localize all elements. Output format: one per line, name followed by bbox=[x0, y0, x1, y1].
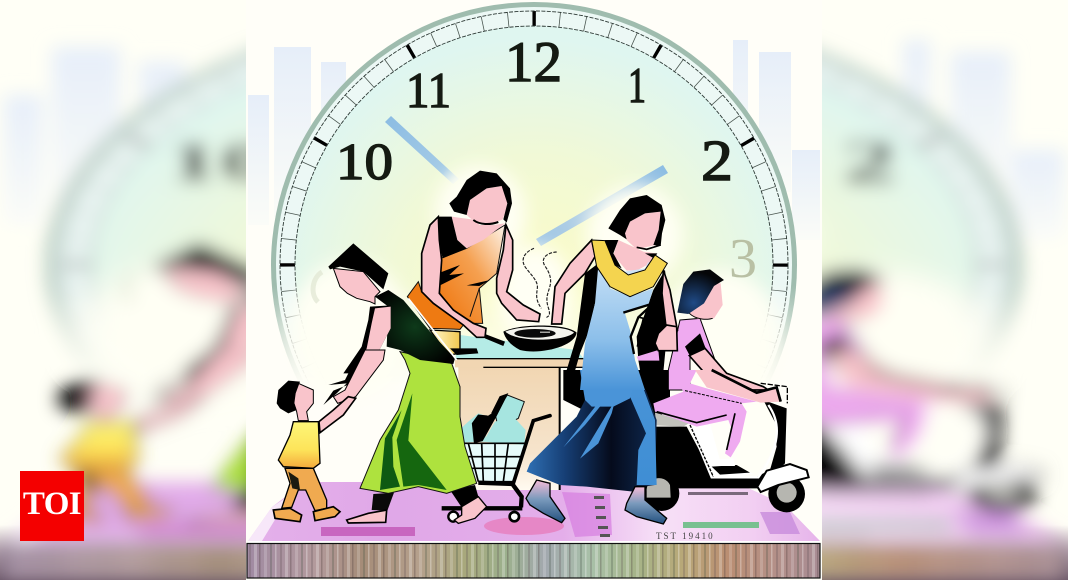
panel artwork bbox=[247, 2, 820, 578]
soft glow behind figures bbox=[290, 165, 780, 410]
clock numerals: 10 bbox=[336, 134, 393, 191]
logo: TOI badge: TOI bbox=[23, 486, 81, 522]
steam bbox=[523, 248, 557, 318]
scooter rider legs bbox=[653, 370, 781, 457]
clock numerals: 2 bbox=[701, 128, 733, 193]
city skyline bbox=[248, 40, 820, 240]
scooter bbox=[563, 370, 809, 512]
blurred background copy of the illustration: 11 bbox=[297, 62, 380, 119]
centre panel bbox=[246, 0, 822, 580]
woman in blue dress bbox=[526, 195, 677, 524]
blurred background copy of the illustration: 1 bbox=[708, 57, 742, 114]
blue dress upper bbox=[552, 195, 677, 390]
green skirt and legs bbox=[347, 352, 487, 523]
shopping cart bbox=[442, 394, 550, 522]
banknote stack side bbox=[247, 544, 820, 578]
green-skirt woman upper body bbox=[328, 243, 457, 373]
clock numerals: 3 bbox=[729, 228, 757, 290]
banknote platform bbox=[248, 482, 820, 544]
clock hands bbox=[385, 116, 668, 246]
clock numerals: 11 bbox=[406, 62, 451, 118]
woman on scooter bbox=[653, 269, 781, 457]
blurred background copy of the illustration: 10 bbox=[167, 132, 273, 192]
clock bbox=[271, 2, 797, 528]
blue dress lower bbox=[526, 370, 667, 524]
logo: TOI badge bbox=[20, 471, 84, 541]
blurred background copy of the illustration: 12 bbox=[480, 31, 588, 96]
banknote platform: TST 19410 bbox=[656, 531, 715, 541]
scooter rider upper body bbox=[668, 269, 768, 390]
woman in green skirt bbox=[323, 243, 487, 523]
green-skirt woman hand bbox=[323, 350, 385, 405]
clock numerals: 1 bbox=[628, 57, 646, 113]
kitchen table bbox=[430, 330, 585, 490]
clock numerals bbox=[336, 31, 757, 290]
child bbox=[273, 381, 356, 522]
clock numerals: 12 bbox=[505, 31, 562, 94]
faded numeral 9 trace bbox=[313, 272, 322, 302]
frying pan bbox=[503, 326, 577, 351]
woman cooking in orange sari bbox=[407, 171, 540, 337]
blurred background copy of the illustration: 2 bbox=[842, 129, 897, 195]
